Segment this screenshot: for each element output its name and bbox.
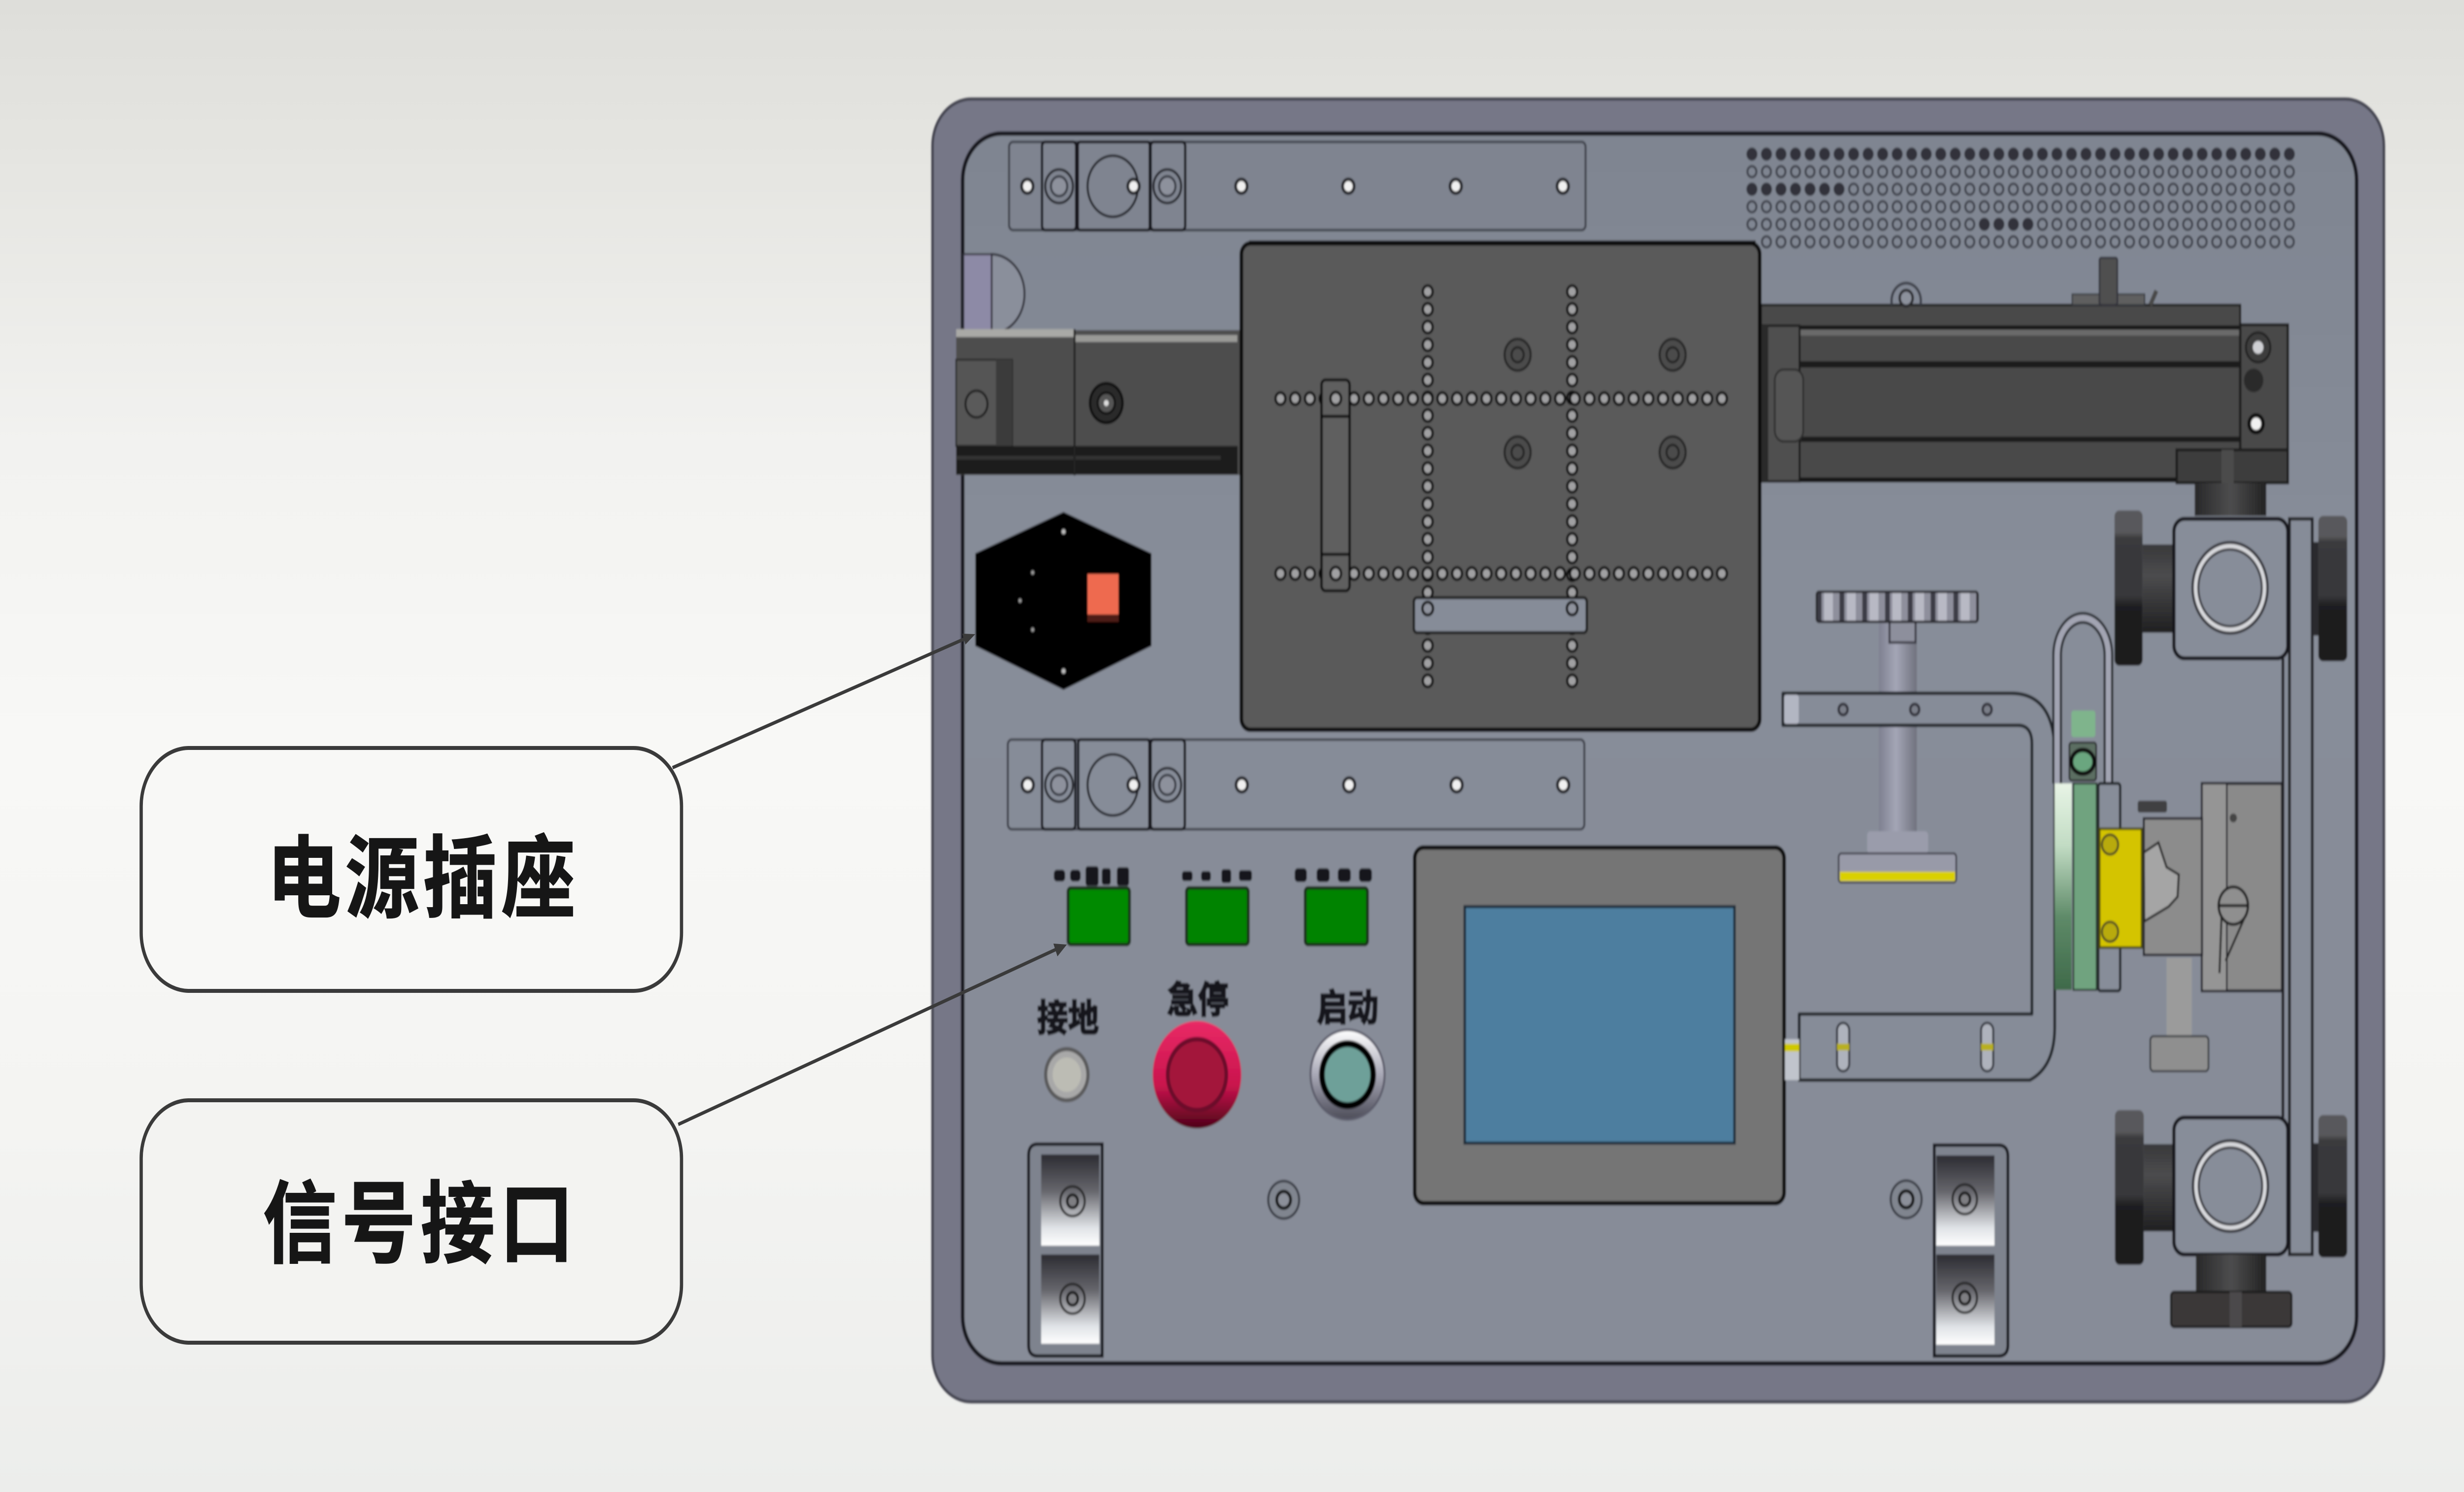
mounting bar top xyxy=(1009,142,1585,230)
hole rows xyxy=(1273,283,1729,690)
screw xyxy=(1891,1181,1921,1218)
rail end block xyxy=(2177,325,2288,516)
arrow: to power socket xyxy=(673,634,975,768)
left actuator rail xyxy=(956,329,1241,475)
U-shaped tube xyxy=(2057,618,2108,783)
horizontal clamp xyxy=(1414,598,1587,633)
ground terminal label: 接地 xyxy=(1037,997,1099,1039)
perforated vent grid xyxy=(1745,145,2297,251)
upper adjuster block xyxy=(2115,510,2347,666)
callout box xyxy=(141,1100,682,1343)
clamp assembly xyxy=(2054,711,2282,1071)
mounting bar lower xyxy=(1008,740,1584,829)
arrow: to signal interface xyxy=(678,944,1067,1124)
green light 2 xyxy=(1187,888,1248,945)
power socket xyxy=(975,512,1152,690)
handwheel stand xyxy=(1816,592,1978,882)
emergency stop label: 急停 xyxy=(1167,979,1229,1021)
vertical clamp xyxy=(1322,380,1350,591)
outer panel rim xyxy=(932,99,2384,1402)
screw xyxy=(1268,1181,1299,1219)
ground terminal xyxy=(1046,1049,1088,1100)
emergency stop button xyxy=(1153,1021,1241,1128)
green light 1 xyxy=(1068,888,1129,945)
callout: signal interface xyxy=(141,1100,682,1343)
half-round tab xyxy=(963,254,1025,334)
indicator lights xyxy=(1054,866,1372,945)
smudged legends above lights xyxy=(1054,866,1372,886)
clamp pair right xyxy=(1934,1145,2008,1356)
L-shaped bracket xyxy=(1783,693,2054,1080)
right actuator rail xyxy=(1761,305,2242,482)
inner panel xyxy=(962,134,2357,1363)
vertical guide rail xyxy=(2283,519,2312,1255)
lower adjuster block xyxy=(2115,1110,2347,1327)
callout text: 电源插座 xyxy=(267,829,580,929)
green light 3 xyxy=(1305,888,1368,945)
sliding plate xyxy=(1241,240,1760,730)
top hardware on rail xyxy=(1891,258,2156,306)
callout text: 信号接口 xyxy=(263,1175,579,1275)
clamp pair left xyxy=(1028,1144,1102,1356)
callout: power socket xyxy=(141,748,682,991)
machine top view xyxy=(932,99,2384,1402)
touch screen xyxy=(1415,848,1784,1203)
start label: 启动 xyxy=(1317,987,1378,1029)
start button xyxy=(1310,1030,1385,1119)
callout box xyxy=(141,748,682,991)
plate screws xyxy=(1505,339,1686,468)
